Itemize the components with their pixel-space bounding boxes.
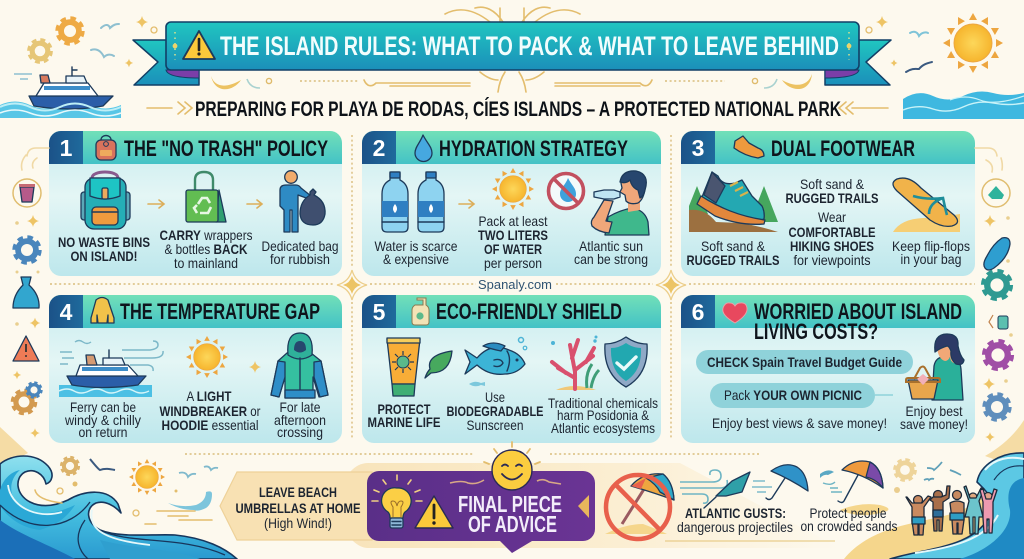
captions: Dedicated bag xyxy=(262,238,338,254)
captions: can be strong xyxy=(574,251,648,267)
captions: per person xyxy=(484,255,542,271)
captions: Wear xyxy=(818,209,846,225)
icon: group of beach people xyxy=(906,486,997,535)
panel 6: living costs: 6 xyxy=(692,299,704,325)
icon: no umbrella xyxy=(605,474,674,539)
icon: wind and flying umbrellas xyxy=(680,461,888,515)
heading: WORRIED ABOUT ISLAND xyxy=(754,299,962,324)
left ribbon tail xyxy=(133,40,199,85)
captions: NO WASTE BINS xyxy=(58,234,150,250)
icon: sun top right xyxy=(943,13,1003,73)
icon: hiking boot scene xyxy=(689,172,778,232)
icon: warning triangle xyxy=(183,31,215,59)
arrow xyxy=(148,200,164,208)
left side icons xyxy=(13,148,49,438)
icon: blue gear xyxy=(985,395,1009,419)
wave right xyxy=(890,453,1024,559)
panel 5: eco shield xyxy=(362,295,661,443)
icon: flip-flop on sand xyxy=(893,178,960,232)
icon: purple gear xyxy=(985,342,1011,368)
pill: budget guide xyxy=(696,350,913,374)
captions: windy & chilly xyxy=(64,412,141,428)
captions: Atlantic ecosystems xyxy=(551,420,655,436)
caption: protect people: Protect people xyxy=(810,505,887,521)
icon: sun xyxy=(492,168,534,210)
icon: hoodie xyxy=(271,333,328,398)
panel 6: living costs xyxy=(681,295,975,443)
right ribbon tail xyxy=(825,40,891,85)
captions: Sunscreen xyxy=(466,417,524,433)
decorations near right wave xyxy=(894,460,961,493)
captions xyxy=(374,213,648,271)
captions: HIKING SHOES xyxy=(790,238,874,254)
decorations left of arrow xyxy=(35,458,218,524)
arrow callout: leave umbrellas xyxy=(220,472,372,540)
ornament: header flourishes xyxy=(125,7,888,92)
captions: Use xyxy=(485,389,505,405)
captions: to mainland xyxy=(174,255,238,271)
callout: final advice: OF ADVICE xyxy=(468,511,557,537)
icon: warning triangle xyxy=(415,496,453,528)
pill: own picnic xyxy=(710,383,893,408)
captions: RUGGED TRAILS xyxy=(786,190,878,206)
icon: twin gears xyxy=(13,383,41,413)
icon: leaf xyxy=(425,351,452,378)
heading: HYDRATION STRATEGY xyxy=(439,136,628,161)
icon: person drinking xyxy=(591,171,649,235)
icon: backpack xyxy=(81,172,130,229)
captions: Keep flip-flops xyxy=(892,238,970,254)
icon: gears top left xyxy=(29,19,82,62)
icon: ferry in wind xyxy=(59,340,163,397)
icon: warning xyxy=(13,336,39,361)
icon: water drop xyxy=(415,135,432,162)
captions: Atlantic sun xyxy=(579,238,643,254)
panel 3: footwear: 3 xyxy=(692,135,704,161)
pill: budget guide: CHECK Spain Travel Budget Guide xyxy=(707,354,902,370)
captions: Soft sand & xyxy=(800,176,865,192)
captions: ON ISLAND! xyxy=(70,248,138,264)
captions: harm Posidonia & xyxy=(557,407,650,423)
icon: no water xyxy=(548,174,584,208)
captions: A LIGHT xyxy=(186,388,232,404)
icon: light bulb xyxy=(372,475,422,528)
icon: heart xyxy=(723,303,747,323)
heading: THE TEMPERATURE GAP xyxy=(120,299,320,324)
captions: CARRY wrappers xyxy=(160,227,252,243)
captions: & expensive xyxy=(383,251,449,267)
captions: PROTECT xyxy=(378,401,431,417)
icon: small shoe xyxy=(734,136,764,158)
icon: sun xyxy=(186,336,228,378)
heading: ECO-FRIENDLY SHIELD xyxy=(436,299,622,324)
captions: for rubbish xyxy=(270,251,330,267)
captions: Water is scarce xyxy=(374,238,458,254)
icon: clipboard xyxy=(989,315,1008,329)
caption: atlantic gusts: ATLANTIC GUSTS: xyxy=(685,505,786,521)
heading: DUAL FOOTWEAR xyxy=(771,136,915,161)
icon: seagulls top right xyxy=(890,32,932,72)
captions: for viewpoints xyxy=(794,252,870,268)
captions: TWO LITERS xyxy=(478,227,548,243)
captions: Pack at least xyxy=(478,213,548,229)
icon: ferry top left xyxy=(0,67,121,118)
panel 2: hydration xyxy=(362,131,661,276)
icon: yellow jacket xyxy=(91,298,114,323)
icon: sparkle xyxy=(249,361,261,373)
sand corners xyxy=(0,420,1024,559)
arrow xyxy=(459,200,474,208)
icon: recycling bag xyxy=(186,172,226,222)
caption: protect people xyxy=(800,505,898,534)
panel 4: temperature: 4 xyxy=(60,299,73,325)
captions: MARINE LIFE xyxy=(368,414,440,430)
captions: BIODEGRADABLE xyxy=(446,403,544,419)
icon: trash bin xyxy=(13,179,41,207)
icon: coral xyxy=(551,336,599,390)
icon: water bottles xyxy=(382,172,444,232)
arrow callout: leave umbrellas: LEAVE BEACH xyxy=(259,484,337,500)
captions xyxy=(64,388,326,440)
right side icons xyxy=(975,148,1013,442)
icon: woman with basket xyxy=(906,334,964,400)
icon: blue bag xyxy=(13,277,39,308)
captions xyxy=(58,227,338,271)
icon: gear xyxy=(15,238,39,262)
heading: THE "NO TRASH" POLICY xyxy=(124,136,328,161)
icon: smiley xyxy=(484,442,540,490)
captions: Ferry can be xyxy=(70,399,136,415)
panel 1: no trash xyxy=(49,131,342,276)
captions: afternoon xyxy=(274,412,326,428)
captions xyxy=(368,389,658,436)
captions: Soft sand & xyxy=(701,238,766,254)
panel 5: eco shield: 5 xyxy=(373,299,386,325)
caption: atlantic gusts: dangerous projectiles xyxy=(677,519,793,535)
pill: own picnic: Pack YOUR OWN PICNIC xyxy=(724,387,862,403)
captions: Enjoy best views & save money! xyxy=(712,415,887,431)
captions: WINDBREAKER or xyxy=(160,403,261,419)
heading: LIVING COSTS? xyxy=(754,319,878,344)
title ribbon xyxy=(133,22,891,85)
icon: shield xyxy=(605,337,647,387)
captions: & bottles BACK xyxy=(164,241,248,257)
captions: HOODIE essential xyxy=(162,417,258,433)
captions: crossing xyxy=(277,424,323,440)
heading xyxy=(754,299,962,344)
captions: in your bag xyxy=(900,251,962,267)
icon: mountain badge xyxy=(982,179,1010,207)
panel 2: hydration: 2 xyxy=(373,135,385,161)
icon: sunscreen tube xyxy=(387,338,420,396)
dividers and center ornament xyxy=(50,135,975,454)
icon: seagulls top left xyxy=(91,24,119,57)
captions: COMFORTABLE xyxy=(788,224,876,240)
callout: final advice xyxy=(367,471,595,553)
website label: Spanaly.com xyxy=(478,278,552,292)
icon: lotion bottle xyxy=(412,298,429,325)
captions xyxy=(686,176,970,268)
captions: save money! xyxy=(900,416,968,432)
wave left xyxy=(0,456,237,559)
captions: Enjoy best xyxy=(906,403,963,419)
captions: OF WATER xyxy=(484,241,542,257)
captions: RUGGED TRAILS xyxy=(686,252,780,268)
captions xyxy=(712,403,968,432)
arrow callout: leave umbrellas: UMBRELLAS AT HOME xyxy=(236,500,360,516)
caption: atlantic gusts xyxy=(677,505,793,535)
advice band xyxy=(220,442,898,553)
panel 4: temperature xyxy=(49,295,342,443)
icon: flip-flop xyxy=(984,238,1010,270)
callout text: FINAL PIECE xyxy=(458,491,562,517)
panel 1: no trash: 1 xyxy=(60,135,73,161)
icon: small backpack xyxy=(96,136,116,160)
icon: fish xyxy=(465,338,527,386)
wave top right xyxy=(903,92,1024,119)
caption: protect people: on crowded sands xyxy=(800,518,898,534)
icon: teal gear xyxy=(984,272,1010,298)
arrow xyxy=(247,200,262,208)
captions: on return xyxy=(78,424,128,440)
captions: Traditional chemicals xyxy=(548,395,658,411)
captions: For late xyxy=(280,399,321,415)
panel 3: footwear xyxy=(681,131,975,276)
icon: person with rubbish bag xyxy=(280,171,325,232)
arrow callout: leave umbrellas: (High Wind!) xyxy=(264,515,332,531)
